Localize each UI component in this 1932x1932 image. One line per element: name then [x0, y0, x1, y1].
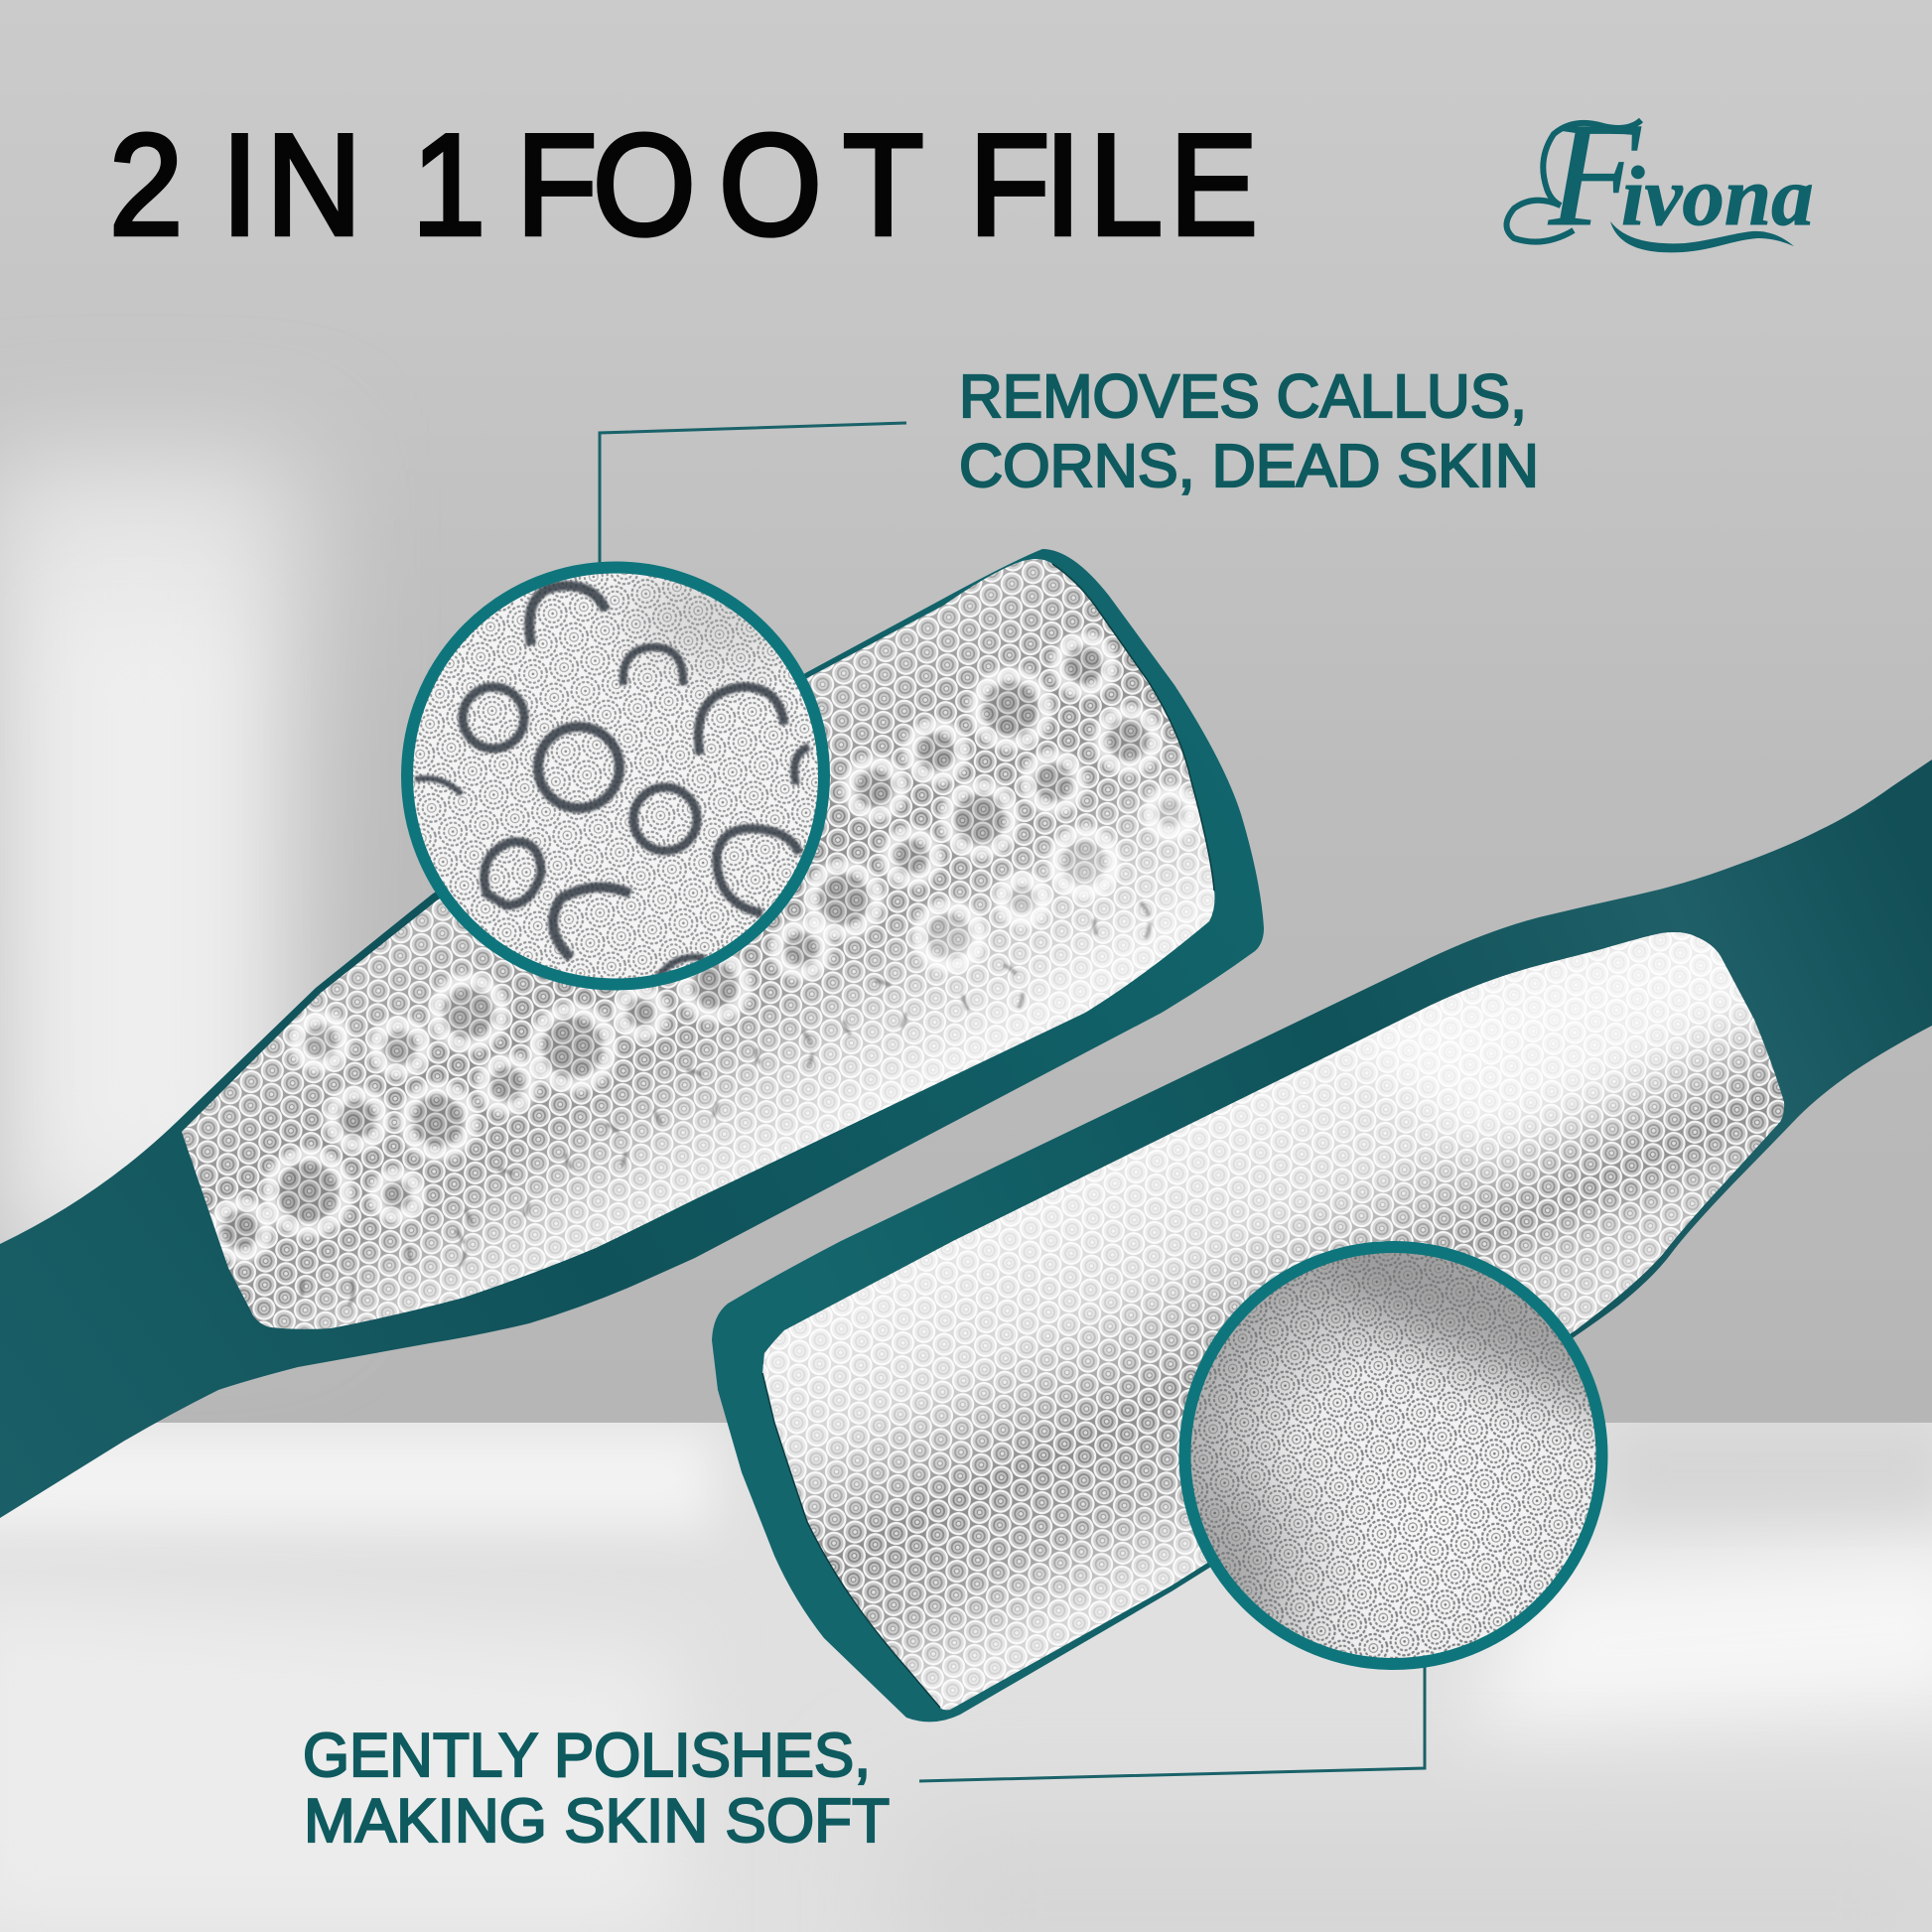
magnifier: coarse texture close-up	[397, 556, 834, 993]
label: coarse side benefit: REMOVES CALLUS,	[959, 362, 1527, 430]
teal handle of upper file	[0, 549, 1264, 1518]
teal handle of lower file	[712, 759, 1932, 1722]
product: upper foot file (coarse side)	[0, 526, 1264, 1518]
teal ring	[1185, 1247, 1602, 1664]
fine metal plate	[762, 932, 1785, 1710]
product: lower foot file (fine side)	[712, 759, 1932, 1727]
label: fine side benefit: MAKING SKIN SOFT	[304, 1787, 890, 1856]
callout: fine side connector line	[919, 1666, 1425, 1781]
background: studio wall and floor	[0, 423, 1932, 1932]
logo swash	[1610, 221, 1794, 252]
magnifier: fine texture close-up	[1179, 1241, 1608, 1670]
label: coarse side benefit: CORNS, DEAD SKIN	[959, 432, 1539, 499]
callout: coarse side connector line	[600, 423, 906, 566]
logo wordmark: F	[1548, 92, 1641, 257]
title: 2 IN 1 FOOT FILE	[109, 104, 1258, 265]
logo flourish loops	[1507, 120, 1641, 242]
thin shadow edge of plate	[1052, 564, 1214, 891]
logo wordmark: ivona	[1621, 150, 1814, 243]
coarse metal plate	[182, 559, 1215, 1329]
label: fine side benefit: GENTLY POLISHES,	[303, 1722, 871, 1790]
teal ring	[407, 568, 824, 985]
logo: Fivona	[1507, 92, 1814, 257]
thin shadow edge of plate	[762, 1373, 940, 1708]
